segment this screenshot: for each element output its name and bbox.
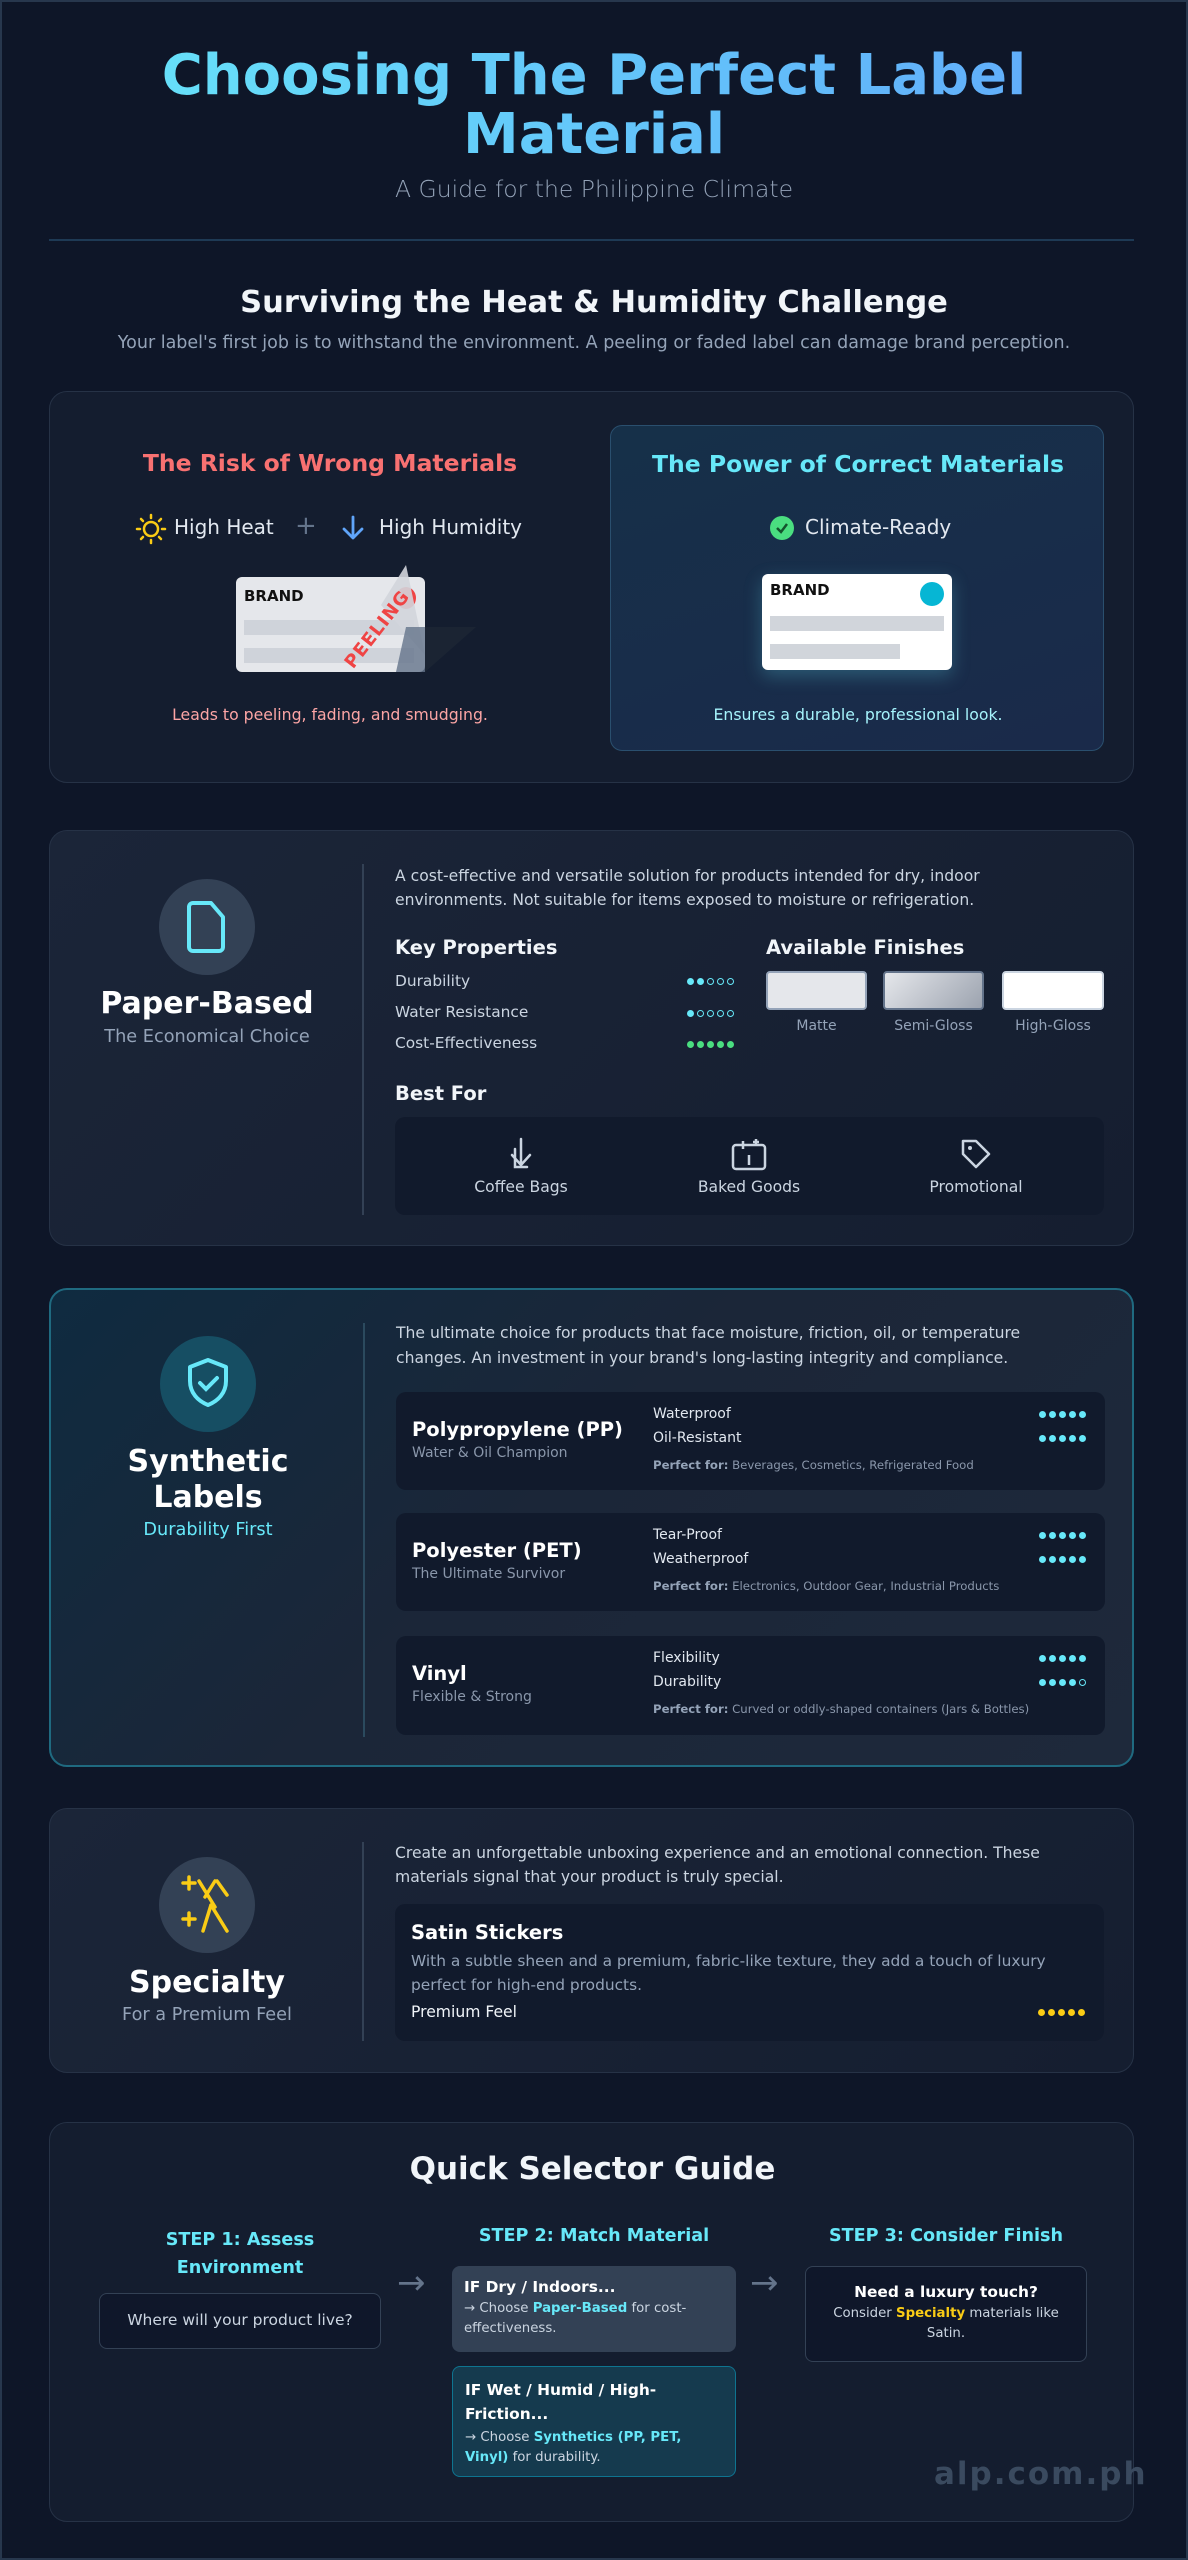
title (0, 46, 1188, 164)
panel: heat & humidity comparison (49, 391, 1134, 783)
option: wet: IF Wet / Humid / High-Friction... (465, 2381, 656, 2423)
icon: baked goods (698, 1139, 800, 1196)
available finishes: Semi-Gloss (894, 1018, 973, 1034)
icon: promotional (929, 1140, 1023, 1196)
key properties: Key Properties (395, 936, 557, 959)
card: polypropylene: Polypropylene (PP) (412, 1418, 623, 1441)
card: satin stickers (395, 1904, 1104, 2041)
available finishes: Matte (796, 1018, 837, 1034)
section intro text: Your label's first job is to withstand the environment. A peeling or faded label can damage brand perception. (118, 333, 1070, 353)
available finishes: Available Finishes (766, 936, 964, 959)
icon: promotional: Promotional (929, 1178, 1023, 1196)
key properties: Cost-Effectiveness (395, 1034, 537, 1052)
key properties: Water Resistance (395, 1003, 528, 1021)
heading: risk: The Risk of Wrong Materials (143, 449, 517, 477)
best-for uses (395, 1117, 1104, 1215)
card: polyester: The Ultimate Survivor (412, 1566, 565, 1582)
watermark: alp.com.ph (934, 2456, 1148, 2492)
description: The ultimate choice for products that face moisture, friction, oil, or temperature changes. An investment in your brand's long-lasting integrity and compliance. (396, 1324, 1020, 1367)
available finishes: High-Gloss (1015, 1018, 1091, 1034)
panel: paper-based (49, 830, 1134, 1246)
conditions: heat + humidity (136, 511, 522, 544)
step 1: Environment (177, 2258, 303, 2278)
card: vinyl: Perfect for: Curved or oddly-shaped containers (Jars & Bottles) (653, 1702, 1029, 1716)
heading: quick selector: Quick Selector Guide (410, 2151, 775, 2187)
icon: shield (160, 1336, 256, 1432)
icon: baked goods: Baked Goods (698, 1178, 800, 1196)
description: A cost-effective and versatile solution for products intended for dry, indoor environments. Not suitable for items exposed to moisture or refrigeration. (395, 867, 980, 909)
card: vinyl: Flexibility (653, 1650, 720, 1666)
conditions: heat + humidity: + (295, 511, 317, 541)
step 1 (99, 2230, 381, 2349)
heading: paper-based: Paper-Based (100, 986, 314, 1021)
section heading: Surviving the Heat & Humidity Challenge (240, 285, 948, 320)
step 3: Need a luxury touch? (854, 2283, 1038, 2301)
card: vinyl: Durability (653, 1674, 721, 1690)
card: vinyl: Vinyl (412, 1662, 467, 1685)
illustration: intact label (762, 574, 952, 670)
key properties (395, 936, 734, 1052)
illustration: intact label: BRAND (770, 581, 830, 599)
card: polypropylene (396, 1392, 1105, 1490)
panel: quick selector guide (49, 2122, 1134, 2522)
heading: specialty: Specialty (129, 1965, 285, 2000)
step 2 (452, 2226, 736, 2477)
option: wet: → Choose Synthetics (PP, PET, Vinyl) for durability. (465, 2430, 681, 2465)
illustration: peeling label (236, 565, 425, 673)
panel: correct materials (610, 425, 1104, 751)
description: Create an unforgettable unboxing experience and an emotional connection. These materials signal that your product is truly special. (395, 1844, 1040, 1886)
badge: climate-ready: Climate-Ready (805, 515, 951, 539)
step 1: STEP 1: Assess (166, 2230, 314, 2250)
card: satin stickers: Premium Feel (411, 2003, 517, 2021)
card: polyester: Perfect for: Electronics, Outdoor Gear, Industrial Products (653, 1579, 999, 1593)
step 2: STEP 2: Match Material (479, 2226, 709, 2246)
arrow 1: → (397, 2263, 426, 2303)
option: dry (452, 2266, 736, 2352)
card: polypropylene: Water & Oil Champion (412, 1445, 568, 1461)
subheading: For a Premium Feel (122, 2005, 292, 2025)
conditions: heat + humidity: High Heat (174, 515, 274, 539)
option: dry: IF Dry / Indoors... (464, 2278, 615, 2296)
card: polyester (396, 1513, 1105, 1611)
illustration: peeling label: PEELING (341, 586, 414, 673)
caption: risk: Leads to peeling, fading, and smudging. (172, 705, 488, 724)
heading: synthetic labels (128, 1444, 288, 1515)
card: satin stickers: Satin Stickers (411, 1921, 563, 1944)
heading: power: The Power of Correct Materials (652, 450, 1064, 478)
card: vinyl (396, 1636, 1105, 1735)
card: polypropylene: Waterproof (653, 1406, 731, 1422)
title: Choosing The Perfect Label (162, 43, 1026, 108)
conditions: heat + humidity: High Humidity (379, 515, 522, 539)
card: polyester: Polyester (PET) (412, 1539, 582, 1562)
card: vinyl: Flexible & Strong (412, 1689, 532, 1705)
icon: coffee bags (474, 1138, 568, 1196)
subheading: Durability First (143, 1520, 273, 1540)
illustration: peeling label: BRAND (244, 587, 304, 605)
title: Material (463, 102, 725, 167)
panel: specialty (49, 1808, 1134, 2073)
card: satin stickers: With a subtle sheen and a premium, fabric-like texture, they add a touch of luxury perfect for high-end products. (411, 1952, 1046, 1994)
heading: best for: Best For (395, 1082, 486, 1105)
available finishes (766, 936, 1104, 1034)
key properties: Durability (395, 972, 470, 990)
heading: synthetic labels: Labels (153, 1480, 263, 1515)
icon: document (159, 879, 255, 975)
subtitle: A Guide for the Philippine Climate (395, 175, 793, 203)
step 3 (805, 2226, 1087, 2362)
step 3: Consider Specialty materials like Satin. (833, 2306, 1059, 2341)
icon: sparkles (159, 1857, 255, 1953)
icon: coffee bags: Coffee Bags (474, 1178, 568, 1196)
heading: synthetic labels: Synthetic (128, 1444, 288, 1479)
step 1: Where will your product live? (127, 2311, 353, 2329)
caption: power: Ensures a durable, professional look. (713, 705, 1003, 724)
card: polyester: Tear-Proof (653, 1527, 722, 1543)
card: polypropylene: Oil-Resistant (653, 1430, 741, 1446)
step 3: STEP 3: Consider Finish (829, 2226, 1063, 2246)
option: wet (452, 2366, 736, 2477)
subheading: The Economical Choice (104, 1027, 310, 1047)
arrow 2: → (750, 2263, 778, 2303)
panel: synthetic labels (49, 1288, 1134, 1767)
option: dry: → Choose Paper-Based for cost-effectiveness. (464, 2301, 686, 2336)
card: polypropylene: Perfect for: Beverages, Cosmetics, Refrigerated Food (653, 1458, 974, 1472)
card: polyester: Weatherproof (653, 1551, 748, 1567)
